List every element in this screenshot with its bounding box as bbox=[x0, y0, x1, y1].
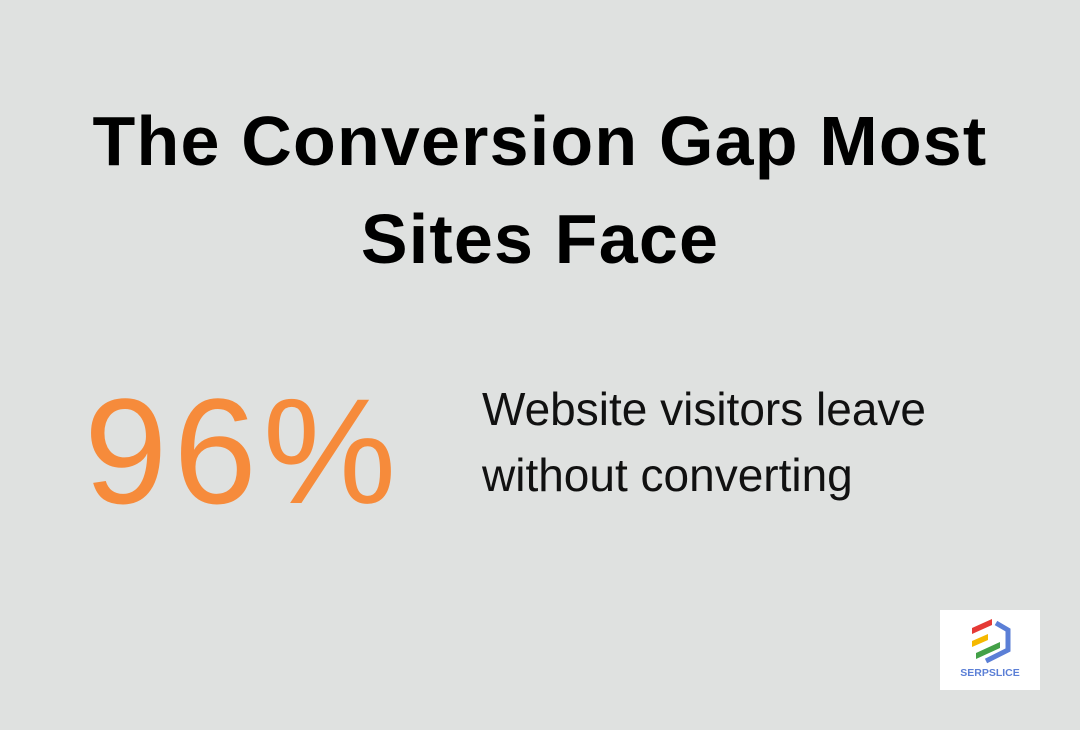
logo bbox=[940, 610, 1040, 690]
logo: SERPSLICE bbox=[960, 667, 1020, 679]
stat description: Website visitors leave bbox=[482, 383, 926, 435]
title bbox=[93, 102, 987, 278]
big stat: 96% bbox=[84, 367, 402, 535]
title: Sites Face bbox=[361, 200, 719, 278]
stat description: without converting bbox=[482, 449, 853, 501]
stat description bbox=[482, 383, 926, 501]
title: The Conversion Gap Most bbox=[93, 102, 987, 180]
